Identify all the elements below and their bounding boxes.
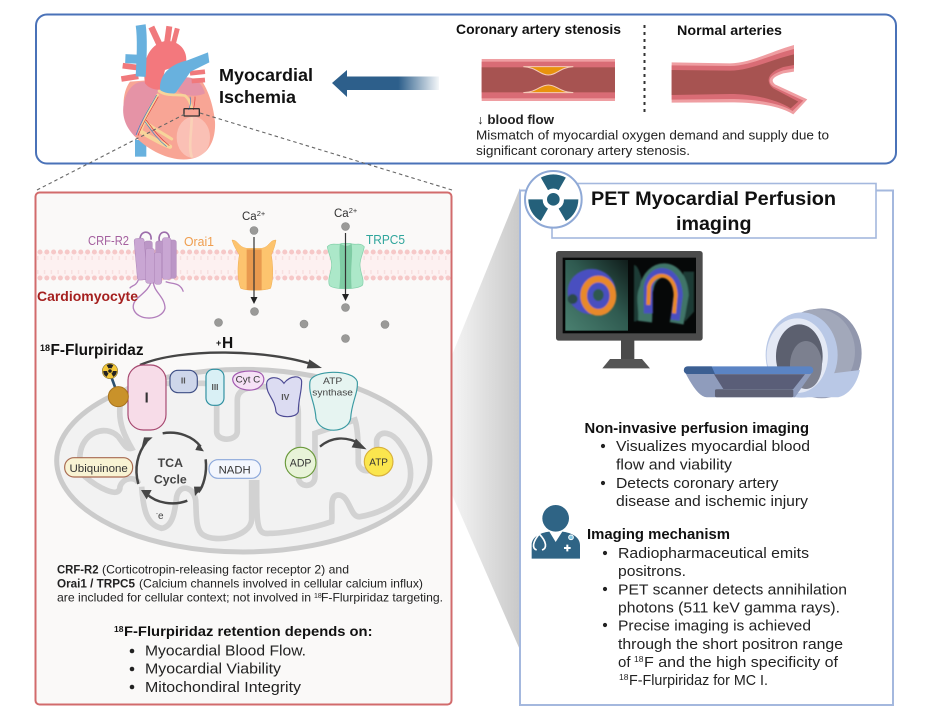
label: Ca2+ right: Ca <box>334 208 349 220</box>
text block: cellular context note: (Corticotropin-releasing factor receptor 2) and <box>102 562 349 576</box>
title box <box>552 184 876 238</box>
text block: cellular context note: F-Flurpiridaz targeting. <box>321 590 443 604</box>
text block: imaging mechanism: of <box>618 654 631 671</box>
zoom cone to PET panel <box>450 188 520 650</box>
list: retention factors: Myocardial Viability <box>145 662 282 678</box>
label: Ca2+ left: Ca <box>242 211 257 223</box>
icon: normal branching artery <box>672 45 807 114</box>
heading: Coronary artery stenosis: Coronary artery stenosis <box>456 21 621 37</box>
list: retention factors: Mitochondiral Integrity <box>145 680 302 696</box>
complex I: I <box>145 390 149 406</box>
cytochrome C <box>233 371 264 390</box>
text block: imaging mechanism: 18 <box>619 672 629 682</box>
complex II <box>170 370 197 393</box>
icon: Orai1 calcium channel <box>232 240 276 290</box>
ADP to ATP arrow <box>320 439 367 449</box>
heading: Myocardial Ischemia: Ischemia <box>219 87 296 107</box>
PET scan short-axis image <box>565 260 628 331</box>
text block: imaging mechanism: photons (511 keV gamma rays). <box>618 600 840 616</box>
ATP synthase <box>310 372 357 430</box>
complex III <box>206 369 224 405</box>
label: Ca2+ right: 2+ <box>349 206 358 215</box>
text block: non-invasive perfusion imaging: Detects coronary artery <box>616 475 779 492</box>
text block: imaging mechanism: positrons. <box>618 563 686 580</box>
text block: blood flow explanation: Mismatch of myocardial oxygen demand and supply due to <box>476 128 829 142</box>
text block: imaging mechanism: Radiopharmaceutical emits <box>618 545 809 562</box>
icon: PET scanner <box>684 308 862 398</box>
text block: imaging mechanism: Imaging mechanism <box>587 527 730 543</box>
title box: imaging <box>676 214 752 235</box>
list: retention factors: Myocardial Blood Flow. <box>145 644 306 660</box>
icon: CRF-R2 receptor <box>130 232 183 318</box>
ATP synthase: ATP <box>323 376 342 386</box>
text block: cellular context note: are included for cellular context; not involved in <box>57 590 311 604</box>
panel: myocardial ischemia overview <box>36 14 896 164</box>
title box: PET Myocardial Perfusion <box>591 189 836 210</box>
panel: PET myocardial perfusion imaging <box>520 171 893 705</box>
complex IV: IV <box>281 392 290 402</box>
text block: cellular context note: 18 <box>314 593 322 600</box>
icon: doctor with stethoscope <box>532 505 580 559</box>
text block: non-invasive perfusion imaging <box>584 421 810 510</box>
icon: TRPC5 calcium channel <box>327 243 364 289</box>
inner membrane cristae <box>80 383 411 539</box>
NADH <box>209 460 261 478</box>
text block: non-invasive perfusion imaging: Visualizes myocardial blood <box>616 438 810 455</box>
arrow: stenosis leads to ischemia <box>332 70 439 97</box>
text block: imaging mechanism <box>587 527 847 689</box>
panel: cardiomyocyte mechanism <box>36 192 452 704</box>
text block: cellular context note <box>57 562 443 604</box>
label: electron: - <box>156 512 158 518</box>
calcium ions and influx arrows <box>214 222 389 342</box>
text block: blood flow explanation <box>476 113 829 158</box>
divider: dotted vertical line <box>644 25 646 116</box>
Ubiquinone: Ubiquinone <box>69 463 128 475</box>
label: 18F-Flurpiridaz: F-Flurpiridaz <box>50 342 144 359</box>
cytochrome C: Cyt C <box>236 375 261 385</box>
text block: cellular context note: Orai1 / TRPC5 <box>57 576 135 590</box>
complex I <box>128 365 166 430</box>
label: Orai1: Orai1 <box>184 235 214 249</box>
complex IV <box>267 377 302 417</box>
list: retention factors <box>130 644 306 696</box>
NADH: NADH <box>219 464 251 476</box>
TCA Cycle label: Cycle <box>154 472 187 486</box>
label: Cardiomyocyte: Cardiomyocyte <box>37 289 138 304</box>
complex III: III <box>212 382 218 392</box>
text block: non-invasive perfusion imaging: flow and viability <box>616 456 733 474</box>
heading: Myocardial Ischemia <box>219 65 313 107</box>
heading: Myocardial Ischemia: Myocardial <box>219 65 313 85</box>
Ubiquinone <box>65 458 133 477</box>
text block: imaging mechanism: F-Flurpiridaz for MC I. <box>629 672 768 689</box>
icon: stenosed coronary artery <box>482 59 615 101</box>
PET scan long-axis image <box>634 265 694 323</box>
label: TRPC5: TRPC5 <box>366 233 405 247</box>
text block: imaging mechanism: PET scanner detects annihilation <box>618 582 847 598</box>
heading: retention depends on: F-Flurpiridaz retention depends on: <box>124 623 372 639</box>
mitochondrion diagram <box>57 353 430 552</box>
heading: retention depends on: 18 <box>114 624 124 634</box>
text block: cellular context note: (Calcium channels involved in cellular calcium influx) <box>139 576 423 590</box>
text block: imaging mechanism: 18 <box>634 654 644 664</box>
ADP <box>285 447 316 478</box>
text block: non-invasive perfusion imaging: disease and ischemic injury <box>616 493 809 510</box>
text block: imaging mechanism: through the short positron range <box>618 636 843 653</box>
icon: monitor with PET scan images <box>556 251 703 368</box>
label: +H: H <box>222 335 233 352</box>
text block: imaging mechanism: Precise imaging is achieved <box>618 618 811 634</box>
cell membrane bilayer <box>37 252 450 278</box>
ATP synthase: synthase <box>312 387 353 397</box>
proton arrow <box>140 353 322 368</box>
text block: non-invasive perfusion imaging: Non-invasive perfusion imaging <box>584 421 809 437</box>
label: +H: + <box>216 338 221 348</box>
text block: imaging mechanism: F and the high specificity of <box>644 654 839 671</box>
label: Ca2+ left: 2+ <box>257 209 266 218</box>
label: electron: e <box>158 511 164 522</box>
text block: blood flow explanation: ↓ blood flow <box>477 113 554 127</box>
TCA cycle arrows <box>136 433 206 503</box>
heading: Normal arteries: Normal arteries <box>677 22 782 38</box>
icon: radiation badge <box>525 171 582 228</box>
text block: cellular context note: CRF-R2 <box>57 562 99 576</box>
TCA Cycle label: TCA <box>158 456 183 470</box>
outer membrane <box>57 369 430 552</box>
zoom connector: heart to cardiomyocyte <box>37 113 452 190</box>
ATP <box>364 447 393 476</box>
complex II: II <box>181 375 186 385</box>
label: CRF-R2: CRF-R2 <box>88 234 129 248</box>
ADP: ADP <box>290 458 311 470</box>
18F-Flurpiridaz tracer <box>102 363 128 407</box>
icon: anatomical heart <box>121 25 215 159</box>
text block: blood flow explanation: significant coronary artery stenosis. <box>476 144 690 158</box>
label: 18F-Flurpiridaz: 18 <box>40 343 50 353</box>
ATP: ATP <box>369 458 388 469</box>
